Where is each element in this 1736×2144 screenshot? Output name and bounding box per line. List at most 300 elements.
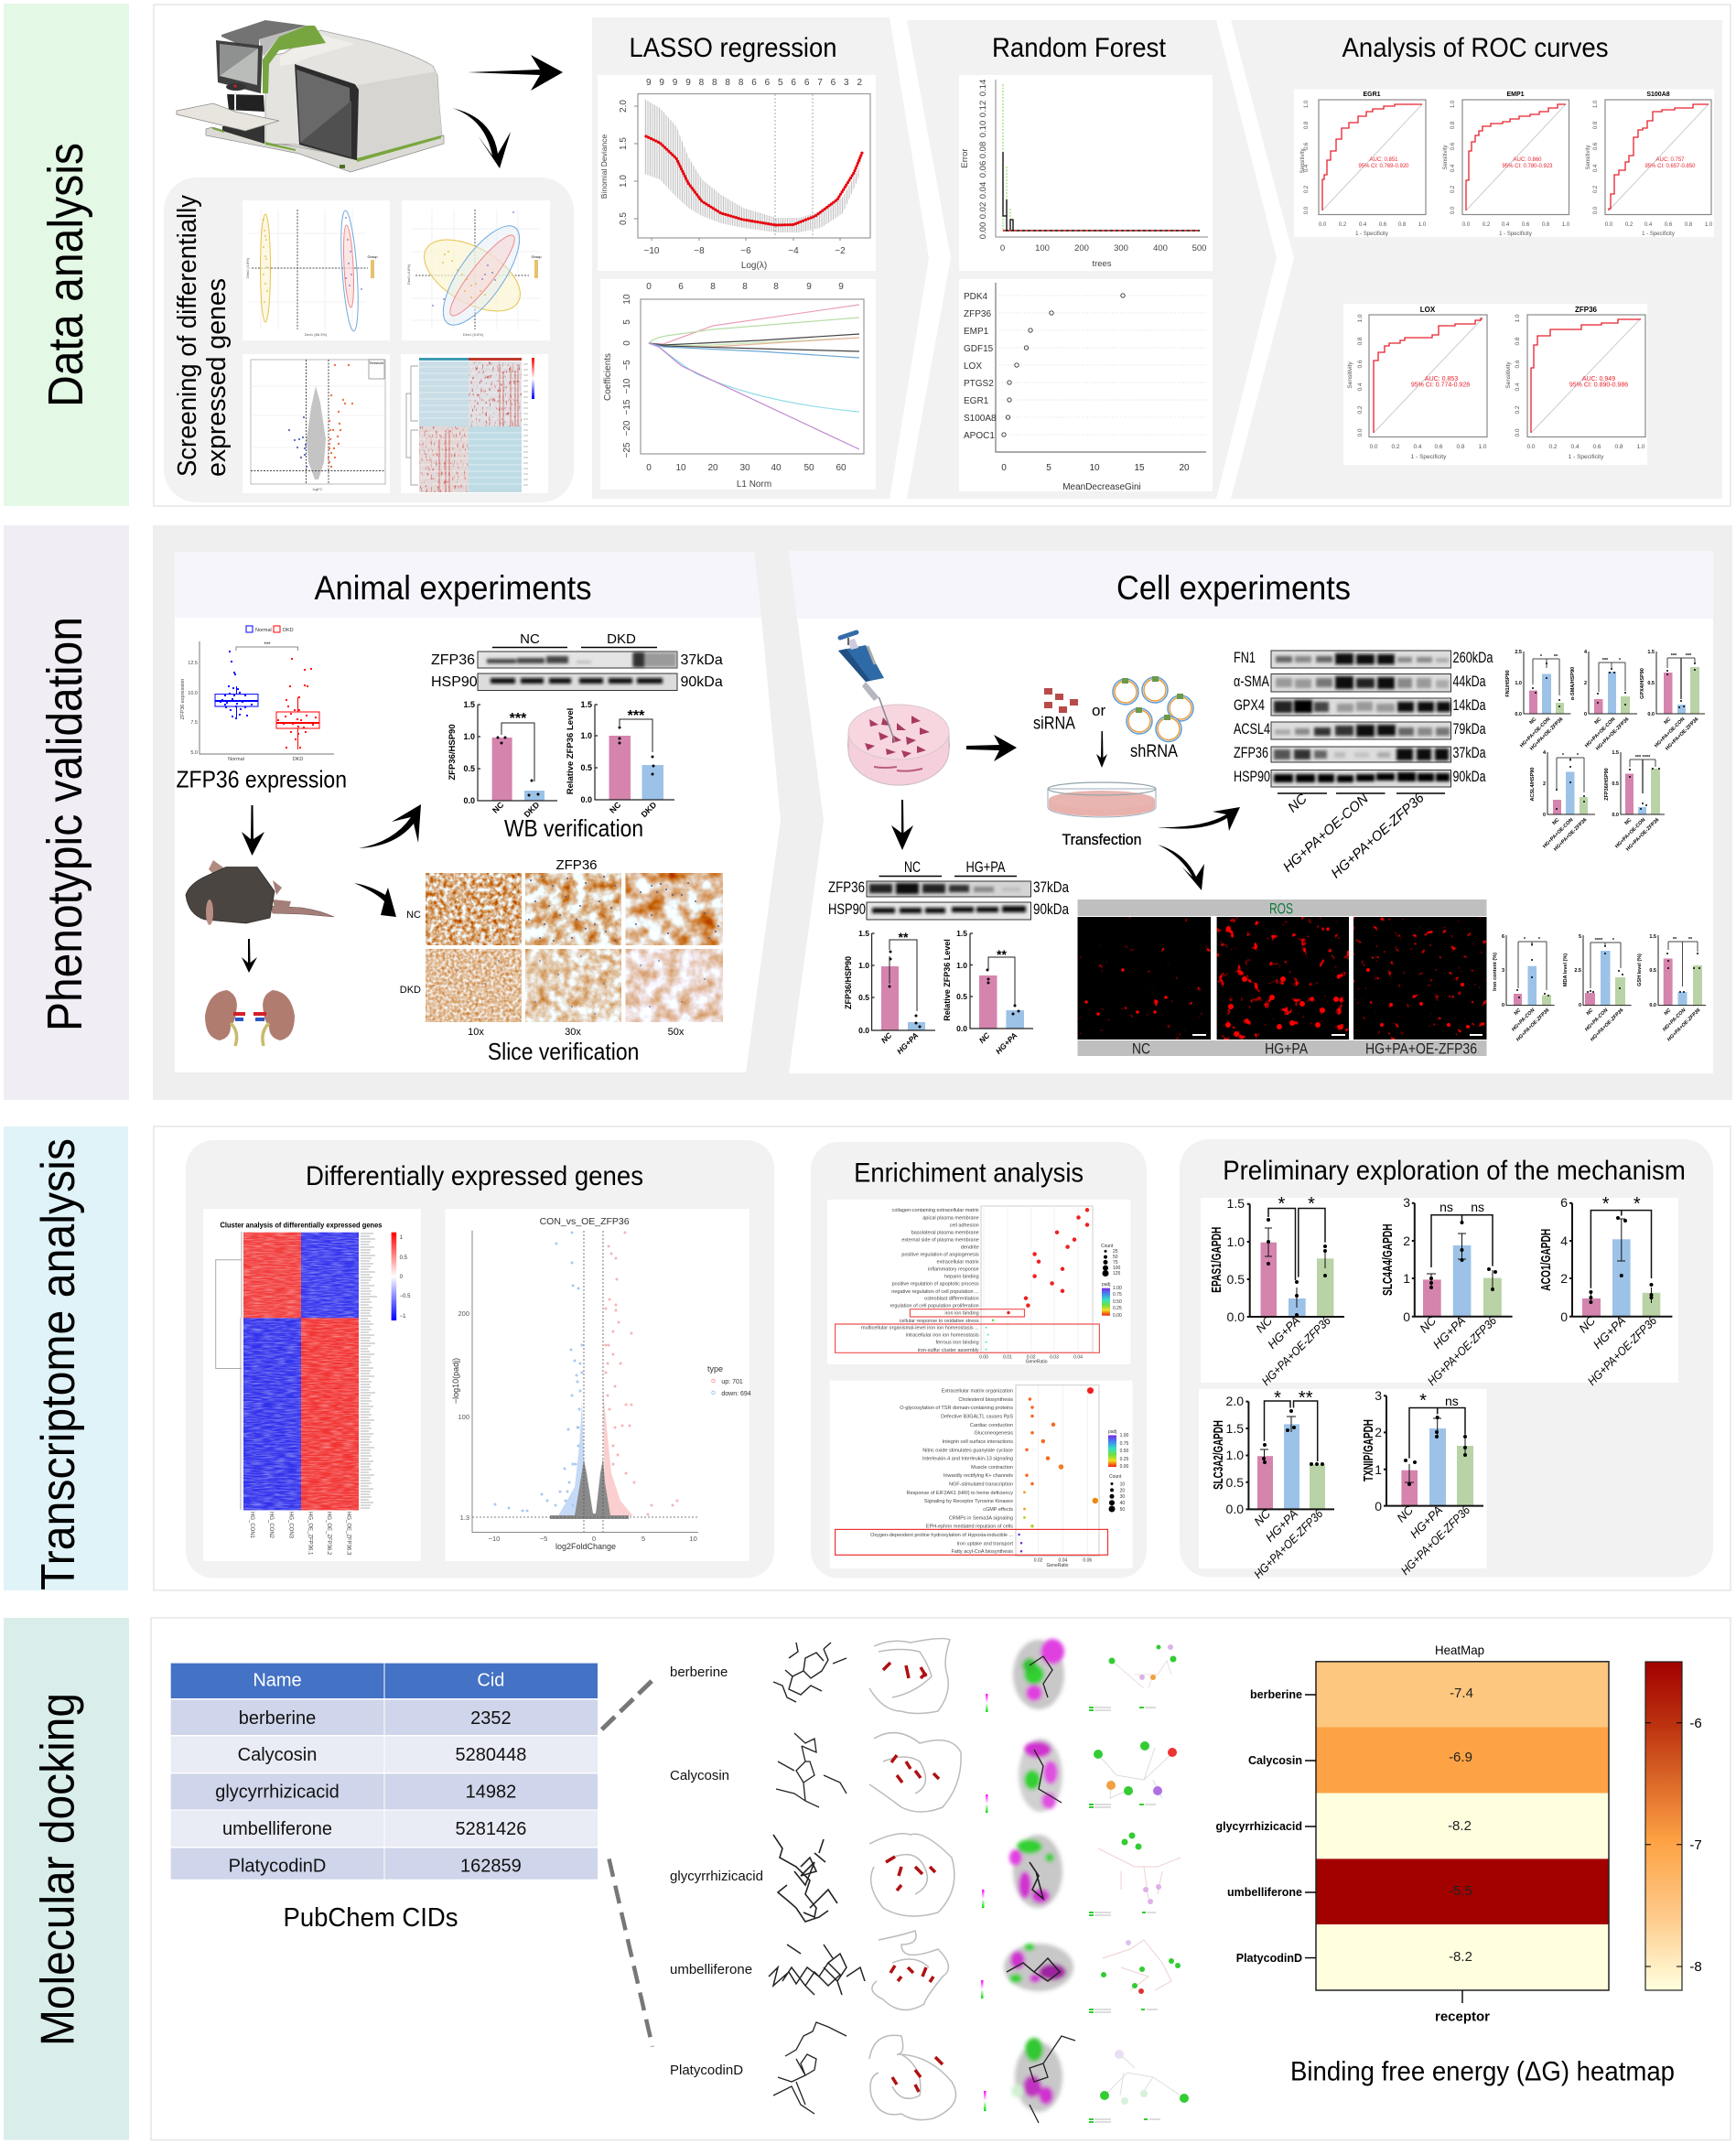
ROC chart: EGR1: 1 - Specificity <box>1355 232 1388 237</box>
bar chart: α-SMA/HSP90: *** <box>1602 658 1609 663</box>
ROC chart: ZFP36: 1.0 <box>1515 314 1521 323</box>
arrow: mouse to kidneys <box>242 939 257 973</box>
bar chart: ZFP36/HSP90 animal: 1.0 <box>463 732 475 741</box>
label: or: or <box>1092 702 1105 719</box>
chart: LASSO coefficients: 0 <box>622 340 632 346</box>
chart: LASSO coefficients: L1 Norm <box>737 479 771 490</box>
bar chart: relative ZFP36 level cell: ** <box>997 947 1007 962</box>
chart: volcano plot CON vs OE_ZFP36: 100 <box>458 1413 469 1421</box>
microscopy: ZFP36 IHC grid: DKD <box>400 985 421 996</box>
arrow: to slice verification <box>354 883 396 917</box>
bar chart: MDA level: 5 <box>1579 934 1581 940</box>
chart: volcano plot CON vs OE_ZFP36: 5 <box>642 1535 645 1543</box>
chart: LASSO coefficients: 8 <box>710 282 716 292</box>
chart: pathway dot plot: EPH-ephrin mediated repulsion of cells <box>926 1525 1013 1530</box>
table: PubChem CIDs: PlatycodinD <box>229 1856 326 1876</box>
bar chart: SLC3A2/GAPDH: SLC3A2/GAPDH <box>1211 1420 1226 1490</box>
ROC chart: LOX: 0.4 <box>1357 382 1364 392</box>
section label: Transcriptome analysis <box>4 1126 128 1590</box>
heatmap: binding free energy: -6.9 <box>1449 1750 1472 1765</box>
ROC chart: EMP1: 1.0 <box>1450 100 1456 108</box>
bar chart: ACSL4/HSP90 <box>1530 750 1595 852</box>
chart: GO dot plot: multicellular organismal-level iron ion homeostasis ... <box>861 1326 979 1331</box>
western blot: ZFP36 and HSP90 animal <box>431 631 723 690</box>
chart: random forest MeanDecreaseGini: EGR1 <box>964 396 989 406</box>
bar chart: SLC3A2/GAPDH: HG+PA <box>1263 1507 1300 1545</box>
bar chart: relative ZFP36 level animal: 1.0 <box>580 731 592 740</box>
chart: ZFP36 expression box plot: 5.0 <box>190 750 198 756</box>
ROC chart: S100A8: Sensitivity <box>1586 145 1591 170</box>
bar chart: SLC3A2/GAPDH: ** <box>1299 1388 1313 1408</box>
heading: cell experiments: Cell experiments <box>1116 569 1351 607</box>
chart: small volcano plot <box>243 354 390 493</box>
chart: GO dot plot: 0.00 <box>979 1354 988 1360</box>
bar chart: FN1/HSP90: NC <box>1529 716 1537 726</box>
chart: LASSO coefficients: 6 <box>678 282 684 292</box>
heading: Random Forest: Random Forest <box>992 33 1167 63</box>
bar chart: α-SMA/HSP90: α-SMA/HSP90 <box>1570 667 1576 700</box>
bar chart: iron content: HG+PA-CON <box>1511 1007 1537 1033</box>
panel: LASSO chevron <box>592 17 929 499</box>
chart: PCA plot two: Group <box>531 254 542 259</box>
ROC chart: EMP1: 0.0 <box>1450 206 1456 214</box>
bar chart: ACSL4/HSP90: NC <box>1552 817 1560 826</box>
chart: GO dot plot: external side of plasma membrane <box>901 1238 979 1244</box>
bar chart: EPAS1/GAPDH <box>1209 1194 1344 1388</box>
bar chart: iron content: 6 <box>1502 934 1504 940</box>
bar chart: ACSL4/HSP90: * <box>1562 753 1565 759</box>
chart: random forest error: 0.04 <box>978 182 988 199</box>
bar chart: TXNIP/GAPDH: ns <box>1445 1394 1459 1408</box>
docking row: PlatycodinD <box>773 2022 1189 2123</box>
bar chart: ACO1/GAPDH: HG+PA+OE-ZFP36 <box>1585 1313 1660 1388</box>
chart: GO dot plot: positive regulation of angiogenesis <box>901 1252 979 1257</box>
panel: transcriptome content <box>154 1126 1731 1590</box>
caption: PubChem CIDs: PubChem CIDs <box>284 1903 458 1933</box>
ROC chart: S100A8: 1.0 <box>1593 100 1599 108</box>
western blots: protein panel: 37kDa <box>1453 744 1486 761</box>
chart: pathway dot plot: Signaling by Receptor Tyrosine Kinases <box>924 1499 1013 1504</box>
microscopy: ROS fluorescence <box>1078 900 1486 1058</box>
bar chart: ZFP36/HSP90 treatment <box>1604 750 1665 852</box>
3D ligand sticks <box>773 1643 846 1702</box>
ROC chart: EMP1: 0.2 <box>1450 185 1456 193</box>
chart: random forest error: 0.10 <box>978 121 988 137</box>
chart: pathway dot plot: padj <box>1108 1429 1116 1435</box>
chart: LASSO binomial deviance: 2.0 <box>619 100 629 113</box>
chart: pathway dot plot: 0.00 <box>1120 1464 1129 1470</box>
chart: random forest error <box>959 75 1213 271</box>
bar chart: MDA level: HG+PA+OE-ZFP36 <box>1590 1007 1625 1042</box>
section label: Data analysis <box>4 4 129 506</box>
chart: random forest error: 300 <box>1114 243 1128 253</box>
heatmap: binding free energy <box>1215 1643 1702 2025</box>
western blot: ZFP36 and HSP90 cell: 37kDa <box>1033 878 1069 896</box>
chart: LASSO coefficients: −25 <box>622 442 632 458</box>
bar chart: relative ZFP36 level cell: 0.0 <box>956 1024 967 1033</box>
bar chart: ZFP36/HSP90 cell: 1.5 <box>858 929 869 938</box>
bar chart: TXNIP/GAPDH: 1 <box>1375 1462 1382 1477</box>
chart: pathway dot plot <box>830 1381 1132 1568</box>
chart: LASSO binomial deviance <box>598 75 876 271</box>
bar chart: iron content: 3 <box>1502 968 1504 974</box>
bar chart: SLC3A2/GAPDH: 1.5 <box>1226 1421 1244 1436</box>
ROC chart: S100A8: 1.0 <box>1705 222 1713 228</box>
bar chart: MDA level <box>1563 934 1632 1042</box>
chart: pathway dot plot: O-glycosylation of TSR domain-containing proteins <box>900 1406 1013 1411</box>
ROC chart: LOX: 0.4 <box>1413 444 1422 450</box>
bar chart: relative ZFP36 level cell: NC <box>977 1030 992 1045</box>
panel: enrichment analysis <box>811 1142 1147 1578</box>
chart: random forest error: 100 <box>1035 243 1050 253</box>
microscopy: ROS fluorescence: ROS <box>1269 900 1293 918</box>
ROC chart: ZFP36: 0.4 <box>1515 382 1521 392</box>
bar chart: MDA level: HG+PA-CON <box>1584 1007 1610 1033</box>
table: PubChem CIDs: 2352 <box>470 1708 512 1729</box>
ROC chart: ZFP36: 0.8 <box>1515 337 1521 346</box>
ROC chart: EMP1: 0.4 <box>1502 222 1510 228</box>
bar chart: ZFP36/HSP90 animal: DKD <box>523 800 542 819</box>
chart: GO dot plot: cellular response to oxidative stress <box>900 1319 979 1324</box>
heatmap: binding free energy: -8.2 <box>1448 1818 1472 1834</box>
bar chart: ZFP36/HSP90 animal: *** <box>510 711 527 727</box>
bar chart: EPAS1/GAPDH: * <box>1278 1194 1286 1214</box>
bar chart: TXNIP/GAPDH: * <box>1419 1391 1427 1411</box>
chart: LASSO coefficients: 50 <box>803 463 814 473</box>
heatmap: binding free energy: umbelliferone <box>1227 1886 1302 1899</box>
chart: ZFP36 expression box plot: Normal <box>255 628 272 633</box>
bar chart: α-SMA/HSP90: 2 <box>1584 681 1587 686</box>
bar chart: GSH level: 0.5 <box>1649 968 1656 974</box>
microscopy: ROS fluorescence: HG+PA+OE-ZFP36 <box>1365 1040 1477 1058</box>
chart: LASSO coefficients: 10 <box>622 294 632 305</box>
bar chart: iron content: NC <box>1514 1007 1523 1017</box>
label: ZFP36 expression: ZFP36 expression <box>176 766 347 793</box>
arrow: dish to transfection <box>966 735 1017 761</box>
section label: Transcriptome analysis: Transcriptome analysis <box>32 1138 85 1590</box>
panel: data analysis content <box>154 5 1731 506</box>
label: Slice verification: Slice verification <box>488 1038 639 1065</box>
heatmap: binding free energy: -5.5 <box>1449 1883 1472 1899</box>
ROC chart: LOX: 95% CI: 0.774-0.928 <box>1411 382 1470 388</box>
bar chart: EPAS1/GAPDH: * <box>1308 1194 1315 1214</box>
bar chart: ZFP36/HSP90 animal: NC <box>491 800 506 815</box>
heatmap: binding free energy: -8.2 <box>1449 1949 1472 1965</box>
bar chart: ACO1/GAPDH: * <box>1602 1194 1610 1214</box>
ROC chart: ZFP36: 0.2 <box>1515 405 1521 415</box>
chart: GO dot plot: intracellular iron ion homeostasis <box>906 1333 979 1339</box>
chart: LASSO coefficients: 9 <box>806 282 812 292</box>
chart: LASSO coefficients: −15 <box>622 399 632 415</box>
chart: LASSO coefficients: 9 <box>838 282 844 292</box>
bar chart: TXNIP/GAPDH: 0 <box>1375 1499 1382 1514</box>
chart: clustered gene heatmap: HG_CON2 <box>268 1512 274 1539</box>
2D interaction map <box>1112 1661 1171 1688</box>
bar chart: TXNIP/GAPDH: 3 <box>1375 1388 1382 1403</box>
chart: pathway dot plot: 0.25 <box>1120 1457 1129 1462</box>
chart: LASSO coefficients: 8 <box>773 282 779 292</box>
chart: volcano plot CON vs OE_ZFP36: −10 <box>489 1535 500 1543</box>
chart: GO dot plot: padj <box>1102 1282 1110 1287</box>
ROC chart: ZFP36: 1 - Specificity <box>1569 454 1604 460</box>
bar chart: α-SMA/HSP90: * <box>1619 658 1622 663</box>
bar chart: relative ZFP36 level animal: 1.5 <box>580 700 592 709</box>
bar chart: MDA level: NC <box>1586 1007 1595 1017</box>
bar chart: ACO1/GAPDH: 4 <box>1560 1234 1568 1248</box>
bar chart: relative ZFP36 level cell: 1.5 <box>956 929 967 938</box>
panel: molecular docking content <box>151 1618 1731 2139</box>
ROC chart: EGR1: 95% CI: 0.769-0.920 <box>1358 164 1409 169</box>
bar chart: GSH level: ** <box>1688 937 1693 943</box>
bar chart: ACSL4/HSP90: HG+PA+OE-ZFP36 <box>1553 817 1588 852</box>
western blot: ZFP36 and HSP90 animal: NC <box>520 631 540 647</box>
chart: pathway dot plot: 10 <box>1120 1482 1125 1488</box>
chart: volcano plot CON vs OE_ZFP36: up: 701 <box>721 1379 743 1385</box>
bar chart: TXNIP/GAPDH: TXNIP/GAPDH <box>1361 1419 1376 1481</box>
chart: ZFP36 expression box plot: 7.5 <box>190 720 198 726</box>
bar chart: ZFP36/HSP90 treatment: *** **** <box>1635 755 1651 760</box>
microscopy: ZFP36 IHC grid: ZFP36 <box>555 857 598 873</box>
chart: random forest error: 200 <box>1074 243 1089 253</box>
ROC chart: S100A8: 0.4 <box>1593 164 1599 172</box>
ROC chart: ZFP36: 1.0 <box>1636 444 1645 450</box>
ROC chart: LOX: 0.0 <box>1369 444 1378 450</box>
bar chart: TXNIP/GAPDH <box>1361 1388 1483 1578</box>
bar chart: ACO1/GAPDH: ACO1/GAPDH <box>1538 1229 1554 1291</box>
chart: clustered gene heatmap: 1 <box>400 1235 404 1241</box>
western blot: ZFP36 and HSP90 animal: ZFP36 <box>431 652 475 668</box>
ROC chart: ZFP36: ZFP36 <box>1575 306 1598 314</box>
bar chart: ZFP36/HSP90 cell: HG+PA <box>895 1030 920 1056</box>
heading: screening: expressed genes <box>202 278 232 477</box>
icon: plasmids <box>1113 676 1193 741</box>
chart: pathway dot plot: 0.02 <box>1034 1557 1043 1563</box>
panel: screening of differentially expressed genes <box>164 178 574 502</box>
ROC chart: EMP1: 1 - Specificity <box>1499 232 1532 237</box>
chart: GO dot plot: cell adhesion <box>950 1223 979 1228</box>
western blot: ZFP36 and HSP90 cell: NC <box>904 858 921 876</box>
chart: GO dot plot: 0.02 <box>1027 1354 1036 1360</box>
chart: random forest error: 0.00 <box>978 222 988 239</box>
bar chart: GSH level: HG+PA-CON <box>1662 1007 1687 1033</box>
bar chart: SLC3A2/GAPDH: * <box>1274 1388 1281 1408</box>
bar chart: FN1/HSP90: 1.0 <box>1515 681 1522 686</box>
chart: GO dot plot: 25 <box>1113 1249 1118 1255</box>
heatmap: binding free energy: PlatycodinD <box>1236 1952 1302 1965</box>
ROC chart: S100A8: 0.0 <box>1605 222 1613 228</box>
label: siRNA: siRNA <box>1033 714 1075 734</box>
chart: GO dot plot: ferrous iron binding <box>936 1341 979 1346</box>
charts: ROC curves top row <box>1294 90 1714 237</box>
ROC chart: LOX: 0.0 <box>1357 428 1364 437</box>
ROC chart: EMP1: AUC: 0.860 <box>1513 157 1542 163</box>
chart: pathway dot plot: NGF-stimulated transcription <box>949 1482 1013 1488</box>
charts: ROC curves bottom row <box>1343 304 1647 465</box>
western blots: protein panel: 44kDa <box>1453 673 1486 690</box>
chart: pathway dot plot: Response of EIF2AK1 (HRI) to heme deficiency <box>907 1491 1013 1496</box>
bar chart: GSH level: 1.5 <box>1649 934 1656 940</box>
bar chart: SLC4A4/GAPDH: ns <box>1471 1200 1484 1214</box>
chart: random forest error: 0.02 <box>978 202 988 219</box>
heatmap: binding free energy: -8 <box>1689 1959 1702 1975</box>
ROC chart: LOX: 0.6 <box>1357 360 1364 369</box>
chart: LASSO binomial deviance: 1.0 <box>619 175 629 188</box>
table: PubChem CIDs: 162859 <box>460 1856 522 1876</box>
chart: GO dot plot: extracellular matrix <box>937 1260 979 1266</box>
western blots: protein panel: FN1 <box>1234 649 1256 666</box>
bar chart: relative ZFP36 level cell: HG+PA <box>994 1030 1019 1056</box>
ROC chart: S100A8: 0.2 <box>1625 222 1634 228</box>
chart: pathway dot plot: 0.04 <box>1059 1557 1067 1563</box>
chart: ZFP36 expression box plot: 12.5 <box>188 661 198 666</box>
section label: Molecular docking <box>4 1618 129 2139</box>
chart: volcano plot CON vs OE_ZFP36: −log10(padj) <box>451 1358 460 1404</box>
ROC chart: EGR1: 1.0 <box>1304 100 1310 108</box>
western blots: protein panel: 260kDa <box>1453 649 1493 666</box>
chart: PCA plot two: Dim1 (5.6%) <box>463 332 484 337</box>
panel: cell experiments <box>789 551 1713 1073</box>
western blots: protein panel: 79kDa <box>1453 720 1486 738</box>
panel: animal experiments <box>175 552 781 1072</box>
chart: random forest error: Error <box>960 148 970 168</box>
panel: differentially expressed genes <box>186 1140 774 1578</box>
chart: GO dot plot: negative regulation of cell population ... <box>891 1289 979 1295</box>
chart: pathway dot plot: 20 <box>1120 1488 1125 1493</box>
bar chart: ACO1/GAPDH <box>1538 1194 1672 1388</box>
bar chart: SLC4A4/GAPDH: 1 <box>1403 1271 1410 1286</box>
ROC chart: S100A8: 1 - Specificity <box>1642 232 1675 237</box>
bar chart: relative ZFP36 level animal: 0.0 <box>580 795 592 804</box>
western blot: ZFP36 and HSP90 animal: 90kDa <box>681 674 723 690</box>
ROC chart: EGR1: 0.6 <box>1304 142 1310 150</box>
chart: volcano plot CON vs OE_ZFP36: type <box>707 1364 723 1374</box>
chart: pathway dot plot: 0.75 <box>1120 1441 1129 1447</box>
chart: random forest error: 0.12 <box>978 101 988 117</box>
bar chart: MDA level: **** <box>1595 938 1603 943</box>
table: PubChem CIDs <box>171 1664 598 1880</box>
ROC chart: EMP1: 0.6 <box>1450 142 1456 150</box>
chart: volcano plot CON vs OE_ZFP36: down: 694 <box>721 1391 751 1397</box>
table: PubChem CIDs: glycyrrhizicacid <box>215 1783 340 1803</box>
ROC chart: EMP1: EMP1 <box>1506 92 1525 98</box>
chart: PCA plot one: Dim2 (4.8%) <box>245 257 250 278</box>
ROC chart: ZFP36: AUC: 0.949 <box>1582 376 1615 382</box>
bar chart: EPAS1/GAPDH: 1.0 <box>1227 1234 1245 1249</box>
chart: PCA plot two: Dim2 (4.8%) <box>406 264 411 285</box>
chart: GO dot plot: 0.75 <box>1113 1292 1122 1298</box>
bar chart: relative ZFP36 level cell: 0.5 <box>956 992 967 1001</box>
chart: clustered gene heatmap: −1 <box>400 1314 406 1320</box>
ROC chart: LOX: 0.8 <box>1456 444 1465 450</box>
ROC chart: S100A8: AUC: 0.757 <box>1655 157 1685 163</box>
microscopy: ZFP36 IHC grid: NC <box>406 910 421 921</box>
microscopy: ROS fluorescence: HG+PA <box>1265 1040 1309 1058</box>
chart: small clustered heatmap <box>401 354 548 493</box>
bar chart: FN1/HSP90: HG+PA+OE-CON <box>1519 716 1551 749</box>
western blots: protein panel: ACSL4 <box>1234 720 1270 738</box>
docking row: berberine <box>773 1639 1177 1713</box>
docking row: Calycosin <box>776 1733 1177 1813</box>
bar chart: ACO1/GAPDH: * <box>1634 1194 1641 1214</box>
bar chart: EPAS1/GAPDH: 0.0 <box>1227 1309 1245 1324</box>
bar chart: α-SMA/HSP90: HG+PA+OE-ZFP36 <box>1595 716 1630 751</box>
chart: pathway dot plot: 1.00 <box>1120 1433 1129 1438</box>
ROC chart: S100A8: 0.2 <box>1593 185 1599 193</box>
chart: LASSO coefficients: 5 <box>622 319 632 325</box>
ROC chart: ZFP36: 0.6 <box>1515 360 1521 369</box>
western blots: protein panel: 90kDa <box>1453 768 1486 785</box>
bar chart: FN1/HSP90: HG+PA+OE-ZFP36 <box>1529 716 1564 751</box>
compound names: glycyrrhizicacid <box>670 1869 763 1884</box>
bar chart: TXNIP/GAPDH: 2 <box>1375 1425 1382 1439</box>
chart: LASSO coefficients: 10 <box>675 463 686 473</box>
bar chart: ACO1/GAPDH: 2 <box>1560 1271 1568 1286</box>
chart: clustered gene heatmap: 0.5 <box>400 1255 408 1261</box>
bar chart: SLC4A4/GAPDH: NC <box>1417 1313 1439 1335</box>
chart: volcano plot CON vs OE_ZFP36: 0 <box>592 1535 596 1543</box>
ROC chart: S100A8: S100A8 <box>1646 92 1670 98</box>
bar chart: ACO1/GAPDH: 6 <box>1560 1195 1568 1210</box>
ROC chart: LOX <box>1347 306 1487 460</box>
bar chart: GSH level: HG+PA+OE-ZFP36 <box>1666 1007 1702 1042</box>
chart: GO dot plot: 75 <box>1113 1260 1118 1266</box>
panel: phenotypic validation background <box>153 525 1732 1100</box>
chart: LASSO binomial deviance: 9 9 9 9 8 8 8 8 6 6 5 6 6 7 6 3 2 <box>646 78 862 88</box>
ROC chart: EMP1: 0.2 <box>1483 222 1491 228</box>
table: PubChem CIDs: Cid <box>477 1671 504 1691</box>
bar chart: ZFP36/HSP90 cell: 1.0 <box>858 961 869 970</box>
connector: table to docking top <box>602 1678 654 1729</box>
chart: clustered gene heatmap: HG_OE_ZFP36.3 <box>346 1512 351 1556</box>
chart: ZFP36 expression box plot: Normal <box>228 757 244 762</box>
bar chart: ACSL4/HSP90: ACSL4/HSP90 <box>1530 767 1536 802</box>
bar chart: EPAS1/GAPDH: NC <box>1253 1313 1276 1335</box>
bar chart: α-SMA/HSP90: NC <box>1594 716 1602 726</box>
chart: GO dot plot: 0.50 <box>1113 1299 1122 1305</box>
western blots: protein panel: HSP90 <box>1234 768 1270 785</box>
bar chart: SLC4A4/GAPDH: ns <box>1439 1200 1453 1214</box>
ROC chart: EMP1: Sensitivity <box>1443 145 1449 170</box>
chart: pathway dot plot: 50 <box>1120 1507 1125 1513</box>
heading: LASSO regression: LASSO regression <box>630 33 836 63</box>
chart: GO dot plot: heparin binding <box>944 1275 979 1280</box>
bar chart: FN1/HSP90: 2.5 <box>1515 650 1522 655</box>
bar chart: ZFP36/HSP90 treatment: ZFP36/HSP90 <box>1604 768 1610 801</box>
ROC chart: LOX: 0.2 <box>1391 444 1400 450</box>
heatmap: binding free energy: HeatMap <box>1435 1643 1484 1657</box>
table: PubChem CIDs: 5281426 <box>455 1819 526 1839</box>
chart: clustered gene heatmap: −0.5 <box>400 1294 411 1299</box>
bar chart: relative ZFP36 level cell <box>943 929 1033 1056</box>
icon: kidneys <box>205 990 295 1046</box>
chart: clustered gene heatmap: HG_OE_ZFP36.2 <box>326 1512 331 1556</box>
bar chart: EPAS1/GAPDH: HG+PA+OE-ZFP36 <box>1259 1313 1333 1388</box>
chart: random forest MeanDecreaseGini: 20 <box>1179 463 1190 473</box>
western blot: ZFP36 and HSP90 cell: 90kDa <box>1033 900 1069 918</box>
compound names: Calycosin <box>670 1768 729 1783</box>
bar chart: relative ZFP36 level animal: NC <box>608 800 623 815</box>
bar chart: SLC4A4/GAPDH: HG+PA <box>1430 1314 1468 1352</box>
chart: ZFP36 expression box plot: DKD <box>293 757 303 762</box>
bar chart: FN1/HSP90: ** <box>1554 654 1558 660</box>
ROC chart: LOX: 1.0 <box>1478 444 1487 450</box>
chart: pathway dot plot: Integrin cell surface interactions <box>943 1439 1013 1445</box>
chart: volcano plot CON vs OE_ZFP36: 200 <box>458 1309 469 1318</box>
bar chart: GPX4/HSP90: 1.5 <box>1647 650 1655 655</box>
western blots: protein panel: α-SMA <box>1234 673 1269 690</box>
chart: random forest MeanDecreaseGini: 10 <box>1089 463 1100 473</box>
chart: pathway dot plot: cGMP effects <box>983 1507 1013 1513</box>
